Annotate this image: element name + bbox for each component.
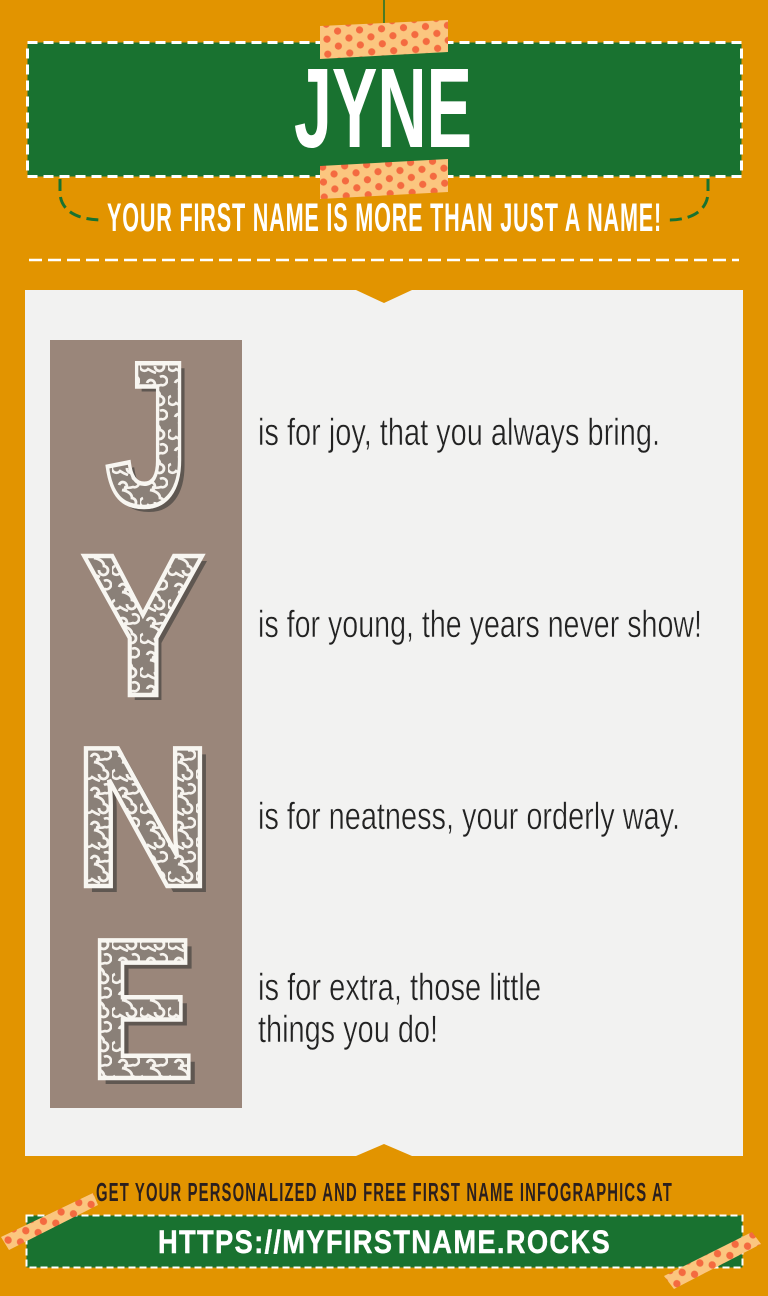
letter column [50, 319, 242, 1127]
title banner [28, 42, 742, 176]
panel: acrostic [25, 290, 743, 1156]
line: E [258, 967, 541, 1051]
hanging string [383, 0, 385, 26]
dashed divider [29, 259, 739, 261]
notch: bottom [356, 1144, 412, 1156]
footer banner [26, 1216, 742, 1268]
letter N: N [73, 706, 213, 929]
letter J: J [110, 324, 195, 554]
tape: banner bottom [320, 159, 448, 199]
bracket: left [60, 179, 103, 220]
letter E: E [95, 904, 201, 1127]
line: E: things you do! [258, 1009, 438, 1051]
bracket: right [669, 179, 708, 220]
letter J: J [105, 319, 190, 549]
notch: top [356, 290, 412, 303]
url: HTTPS://MYFIRSTNAME.ROCKS [158, 1224, 611, 1260]
letter E: E [89, 898, 195, 1121]
letter N: N [79, 712, 219, 935]
tape: banner top [320, 20, 448, 59]
letter Y: Y [86, 517, 210, 743]
title text: JYNE [294, 45, 472, 171]
tape: footer right [664, 1232, 761, 1289]
letter Y: Y [81, 512, 205, 738]
line: E: is for extra, those little [258, 967, 541, 1009]
tape: footer left [1, 1193, 98, 1250]
